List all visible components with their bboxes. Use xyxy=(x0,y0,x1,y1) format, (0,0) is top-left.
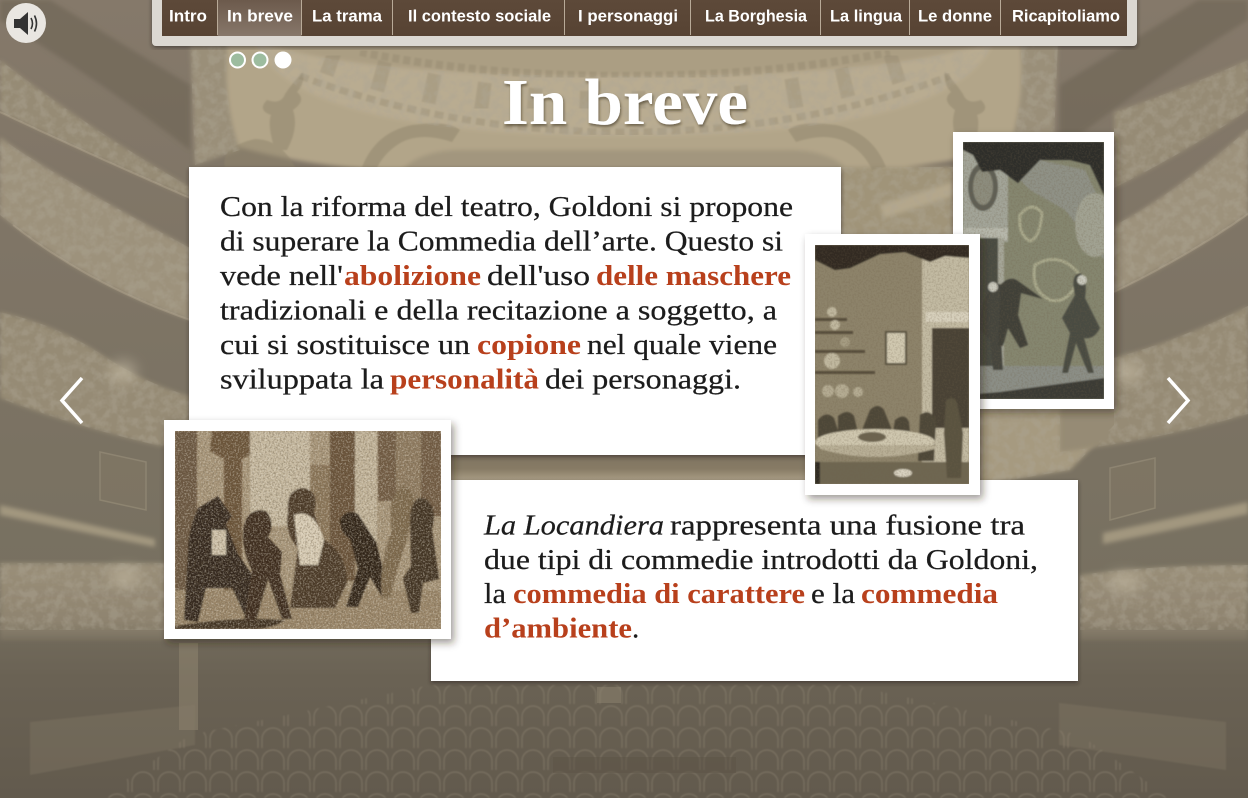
arrow: previous xyxy=(62,378,82,423)
icon: sound button xyxy=(6,3,46,43)
text block: La Locandiera: due tipi di commedie introdotti da Goldoni, xyxy=(484,544,1038,576)
text block: reform: Con la riforma del teatro, Goldoni si propone xyxy=(220,191,793,223)
stage door column xyxy=(179,643,198,730)
ceiling xyxy=(190,40,1114,485)
text block: reform: di superare la Commedia dell’arte. Questo si xyxy=(220,226,783,258)
navigation bar: Il contesto sociale xyxy=(408,8,551,26)
text block: reform: personalità xyxy=(390,364,540,396)
text block: La Locandiera: d’ambiente xyxy=(484,612,632,644)
nav tray xyxy=(152,0,1137,46)
text block: reform: copione xyxy=(477,329,581,361)
stage desk xyxy=(553,757,736,773)
text block: reform: nel quale viene xyxy=(587,329,777,361)
photo: group of seated figures xyxy=(164,420,451,639)
text block: La Locandiera: la xyxy=(484,578,506,610)
text block: reform: abolizione xyxy=(344,260,481,292)
seats xyxy=(100,685,1170,798)
balcony edges xyxy=(0,112,1248,320)
navigation bar: Intro xyxy=(169,8,207,26)
nav wood strip xyxy=(162,0,1127,36)
balcony tiers left xyxy=(0,0,190,640)
panel: Commedia dell'arte reform xyxy=(189,167,841,455)
navigation bar: Le donne xyxy=(918,8,992,26)
panel: La Locandiera xyxy=(431,480,1078,681)
text block: reform xyxy=(220,191,793,396)
navigation bar: I personaggi xyxy=(578,8,678,26)
active tab xyxy=(218,0,302,36)
photo: stage scene with three figures xyxy=(953,132,1115,409)
ceiling ring columns and garlands xyxy=(300,76,950,132)
navigation bar: In breve xyxy=(227,8,293,26)
photo: dining room scene xyxy=(805,234,980,495)
balcony engraving texture xyxy=(0,40,1248,630)
navigation bar: La trama xyxy=(312,8,383,26)
text block: reform: vede nell' xyxy=(220,260,343,292)
navigation bar: Ricapitoliamo xyxy=(1012,8,1120,26)
text block: reform: dei personaggi. xyxy=(545,364,741,396)
text block: reform: cui si sostituisce un xyxy=(220,329,471,361)
text block: reform: delle maschere xyxy=(596,260,791,292)
text block: reform: dell'uso xyxy=(487,260,590,292)
text block: La Locandiera: commedia xyxy=(861,578,999,610)
arrow: next xyxy=(1168,378,1188,423)
band between panels xyxy=(451,455,805,480)
text block: La Locandiera: rappresenta una fusione tra xyxy=(670,510,1025,542)
text block: La Locandiera: . xyxy=(632,612,639,644)
title: In breve xyxy=(502,66,748,139)
text block: La Locandiera: e la xyxy=(811,578,855,610)
side parapets xyxy=(30,703,1226,775)
text block: La Locandiera xyxy=(483,510,1038,644)
text block: reform: tradizionali e della recitazione a soggetto, a xyxy=(220,294,777,326)
ceiling bushes and scrolls xyxy=(224,72,985,170)
navigation bar: La lingua xyxy=(830,8,903,26)
lights xyxy=(109,361,1142,591)
slide progress dots xyxy=(230,52,292,68)
navigation bar: La Borghesia xyxy=(705,8,808,26)
text block: La Locandiera: commedia di carattere xyxy=(513,578,805,610)
balcony tiers right xyxy=(1060,0,1248,640)
navigation bar xyxy=(152,0,1137,46)
box windows xyxy=(100,452,1155,520)
text block: reform: sviluppata la xyxy=(220,364,384,396)
text block: La Locandiera: La Locandiera xyxy=(483,510,664,542)
